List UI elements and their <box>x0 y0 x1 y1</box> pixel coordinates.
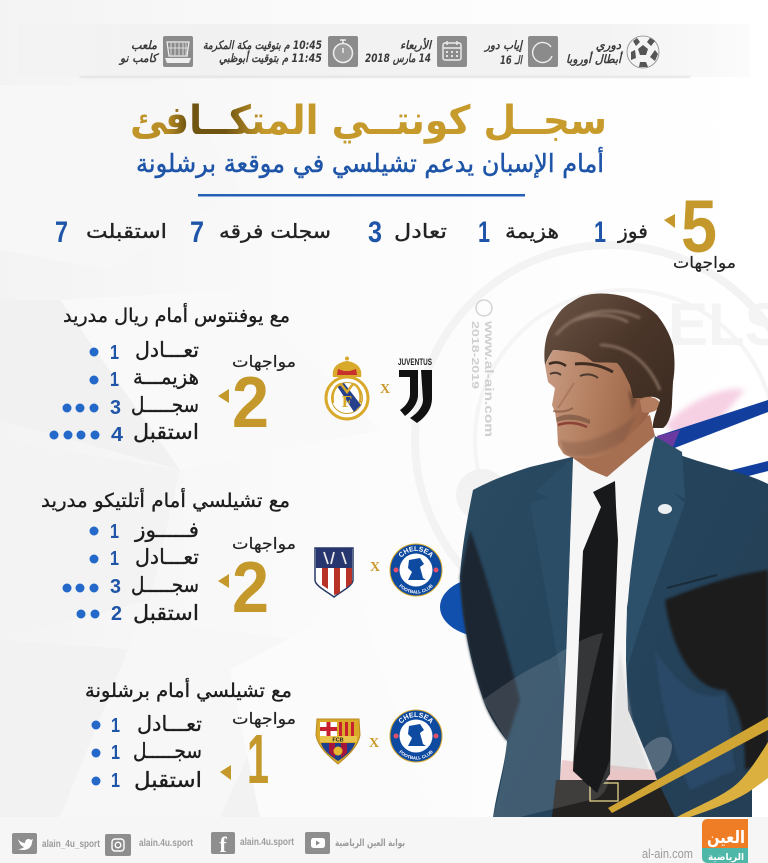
logo: Al-Ain Sports: الرياضية <box>708 852 744 863</box>
row: draws: 1 <box>110 548 119 570</box>
stat: goals conceded <box>55 216 167 249</box>
row: scored: 3 <box>110 576 121 598</box>
row: draws <box>90 338 199 364</box>
row: draws <box>92 712 202 737</box>
heading: مع يوفنتوس أمام ريال مدريد <box>63 303 290 327</box>
row: conceded <box>92 768 202 792</box>
gold stripes <box>608 717 768 817</box>
logo: Chelsea <box>390 710 442 762</box>
big number 2: 2 <box>232 548 269 628</box>
row: scored: سجـــــل <box>131 573 199 597</box>
row: conceded: 2 <box>111 603 122 625</box>
icon: round box <box>528 36 558 67</box>
title: سجــل كونتــي المتكــافئ <box>130 98 607 144</box>
logo: Real Madrid <box>326 356 368 419</box>
row: scored: سجـــــل <box>131 393 199 417</box>
shirt <box>560 435 657 780</box>
row: scored: 1 <box>111 742 120 764</box>
stadium text: ملعب <box>131 38 158 52</box>
stadium text <box>118 38 159 66</box>
neck <box>573 415 655 477</box>
heading: مع تشيلسي أمام أتلتيكو مدريد <box>41 488 290 512</box>
match block: Chelsea v Barcelona <box>85 678 442 798</box>
suit <box>460 438 768 817</box>
match block: Juventus v Real Madrid <box>50 303 432 446</box>
row: conceded <box>50 420 199 446</box>
portrait: Antonio Conte <box>460 294 768 817</box>
row: scored: سجـــــل <box>133 739 202 763</box>
twitter: alain_4u_sport <box>42 839 101 850</box>
kick-off times <box>203 38 322 66</box>
kick-off times: 11:45 م بتوقيت أبوظبي <box>219 50 322 66</box>
date text: 14 مارس 2018 <box>365 51 431 66</box>
row: losses <box>90 365 199 391</box>
stat: goals conceded: استقبلت <box>86 219 167 243</box>
stat: losses: هزيمة <box>505 219 559 243</box>
face <box>545 350 652 458</box>
dark sleeve and body shading <box>460 530 768 790</box>
stat: draws <box>368 216 447 249</box>
row: scored <box>62 573 199 598</box>
big number 2: 2 <box>232 363 269 443</box>
big number 5: 5 <box>681 185 717 268</box>
row: scored <box>92 739 202 764</box>
encounters label: مواجهات <box>232 709 296 729</box>
youtube <box>305 832 405 854</box>
arrow <box>218 574 229 588</box>
versus mark: X <box>369 736 379 751</box>
row: conceded: استقبل <box>134 768 202 792</box>
icon: calendar <box>437 36 467 67</box>
round text: إياب دور <box>483 38 524 53</box>
watermark: 2018-2019 <box>469 321 481 389</box>
arrow <box>664 214 675 228</box>
watermark <box>469 300 496 437</box>
logo: Atletico Madrid <box>315 548 353 597</box>
twitter <box>12 833 101 854</box>
footer <box>0 817 768 863</box>
belt <box>552 780 675 817</box>
logo: Chelsea <box>390 544 442 596</box>
row: losses: 1 <box>110 369 119 391</box>
facebook <box>211 832 295 857</box>
facebook: f <box>219 832 227 857</box>
instagram <box>105 834 194 856</box>
round text: الـ 16 <box>500 53 523 67</box>
stat: draws: 3 <box>368 216 382 249</box>
row: wins <box>90 518 199 543</box>
competition text <box>566 38 624 67</box>
row: draws: تعـــادل <box>135 545 199 569</box>
portrait backdrop accents <box>440 389 768 637</box>
date text <box>365 37 433 66</box>
round text <box>483 38 524 67</box>
row: scored <box>62 393 199 419</box>
heading: مع تشيلسي أمام برشلونة <box>85 678 292 702</box>
row: scored: 3 <box>110 397 121 419</box>
logo: Al-Ain Sports: العين <box>707 828 745 848</box>
facebook: alain.4u.sport <box>240 837 295 848</box>
kick-off times: 10:45 م بتوقيت مكة المكرمة <box>203 38 322 53</box>
row: draws <box>90 545 199 570</box>
row: losses: هزيمـــة <box>133 365 199 389</box>
youtube: بوابة العين الرياضية <box>335 838 405 849</box>
logo: Chelsea: FOOTBALL CLUB <box>399 750 433 760</box>
pin <box>658 504 672 514</box>
match block: Chelsea v Atletico Madrid <box>41 488 442 628</box>
row: conceded: استقبل <box>133 601 199 625</box>
translucent overlay on suit <box>483 633 610 817</box>
encounters label: مواجهات <box>232 534 296 554</box>
icon: football <box>627 36 659 68</box>
competition text: أبطال أوروبا <box>566 51 624 67</box>
row: conceded: 1 <box>111 770 120 792</box>
competition text: دوري <box>596 38 622 53</box>
stat: goals scored: 7 <box>190 216 204 249</box>
hair <box>544 294 674 428</box>
logo: Al-Ain Sports <box>702 819 748 863</box>
subtitle: أمام الإسبان يدعم تشيلسي في موقعة برشلونة <box>136 146 604 179</box>
row: wins: فـــــوز <box>134 518 199 542</box>
stat: wins: 1 <box>594 216 606 249</box>
row: draws: تعـــادل <box>135 338 199 362</box>
lapels <box>530 458 572 689</box>
versus mark: X <box>380 382 390 397</box>
encounters label: مواجهات <box>673 253 736 273</box>
hair highlights <box>556 311 660 390</box>
website: al-ain.com <box>642 847 693 861</box>
date text: الأربعاء <box>400 37 433 53</box>
logo: Chelsea: CHELSEA <box>398 546 433 558</box>
logo: Chelsea: FOOTBALL CLUB <box>399 584 433 594</box>
stat: wins: فوز <box>617 219 648 243</box>
top info band <box>18 24 750 78</box>
watermark: www.al-ain.com <box>482 320 496 437</box>
encounters label: مواجهات <box>232 352 296 372</box>
logo: Barcelona <box>316 719 360 764</box>
stat: draws: تعادل <box>394 219 447 243</box>
logo: Real Madrid: F <box>342 392 352 411</box>
facial features <box>549 362 637 456</box>
row: conceded <box>76 601 199 625</box>
overall record <box>55 185 736 273</box>
versus mark: X <box>370 560 380 575</box>
shirt shadow at waist <box>560 760 657 780</box>
row: conceded: 4 <box>111 424 124 446</box>
icon: stadium <box>163 36 193 67</box>
stat: wins <box>594 216 648 249</box>
logo: Juventus <box>398 357 432 423</box>
row: draws: 1 <box>110 342 119 364</box>
blue divider rule <box>198 194 525 196</box>
instagram: alain.4u.sport <box>139 838 194 849</box>
row: conceded: استقبل <box>133 420 199 444</box>
stat: losses <box>478 216 559 249</box>
stat: goals scored <box>190 216 331 249</box>
row: wins: 1 <box>110 521 119 543</box>
logo: Juventus: JUVENTUS <box>398 357 432 367</box>
logo: Chelsea: CHELSEA <box>398 712 433 724</box>
stat: losses: 1 <box>478 216 490 249</box>
row: draws: 1 <box>111 715 120 737</box>
icon: stopwatch <box>328 36 358 67</box>
row: draws: تعـــادل <box>137 712 202 736</box>
stat: goals conceded: 7 <box>55 216 68 249</box>
tie <box>573 481 618 793</box>
stat: goals scored: سجلت فرقه <box>219 219 331 243</box>
arrow <box>220 765 231 780</box>
big number 1: 1 <box>247 720 269 798</box>
stadium text: كامب نو <box>118 51 159 66</box>
arrow <box>218 389 229 403</box>
logo: Barcelona: FCB <box>332 738 344 744</box>
ear <box>640 397 660 413</box>
